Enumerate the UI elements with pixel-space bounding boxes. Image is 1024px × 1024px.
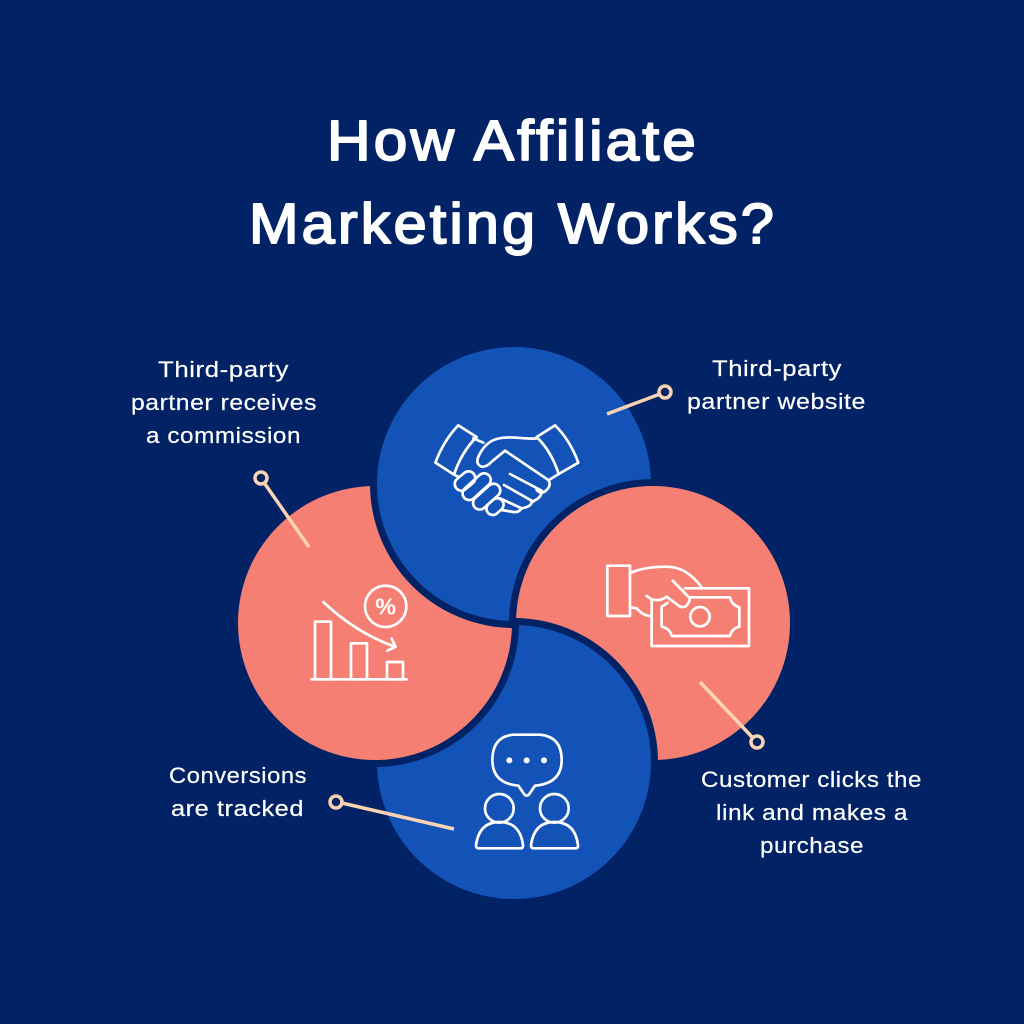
- icon: people talking: [476, 735, 578, 848]
- callout: third-party partner website: partner website: [687, 389, 866, 414]
- callout: conversions are tracked: [169, 763, 454, 829]
- callout: customer clicks the link: purchase: [760, 833, 864, 858]
- icon: falling bar chart with percent: %: [375, 594, 396, 620]
- icon: falling bar chart with percent: [312, 586, 407, 679]
- icon: hand holding money: [607, 566, 749, 646]
- panel: top blue petal: [377, 347, 651, 621]
- callout: conversions are tracked: are tracked: [171, 796, 304, 821]
- panel: right coral petal: [516, 486, 790, 760]
- callout: partner receives a commission: a commission: [146, 423, 301, 448]
- title: [249, 109, 777, 256]
- callout: partner receives a commission: Third-party: [158, 357, 289, 382]
- callout: customer clicks the link: Customer clicks the: [701, 767, 922, 792]
- callout: customer clicks the link: link and makes a: [716, 800, 908, 825]
- callout: third-party partner website: [607, 356, 866, 414]
- infographic canvas: [132, 118, 920, 899]
- title: Marketing Works?: [249, 192, 777, 256]
- panel: left coral petal: [238, 486, 512, 760]
- callout: partner receives a commission: [131, 357, 317, 547]
- icon: handshake: [435, 425, 578, 518]
- callout: customer clicks the link: [700, 682, 922, 858]
- title: How Affiliate: [327, 109, 699, 173]
- callout: third-party partner website: Third-party: [712, 356, 842, 381]
- callout: conversions are tracked: Conversions: [169, 763, 307, 788]
- panel: bottom blue petal: [377, 625, 651, 899]
- callout: partner receives a commission: partner receives: [131, 390, 317, 415]
